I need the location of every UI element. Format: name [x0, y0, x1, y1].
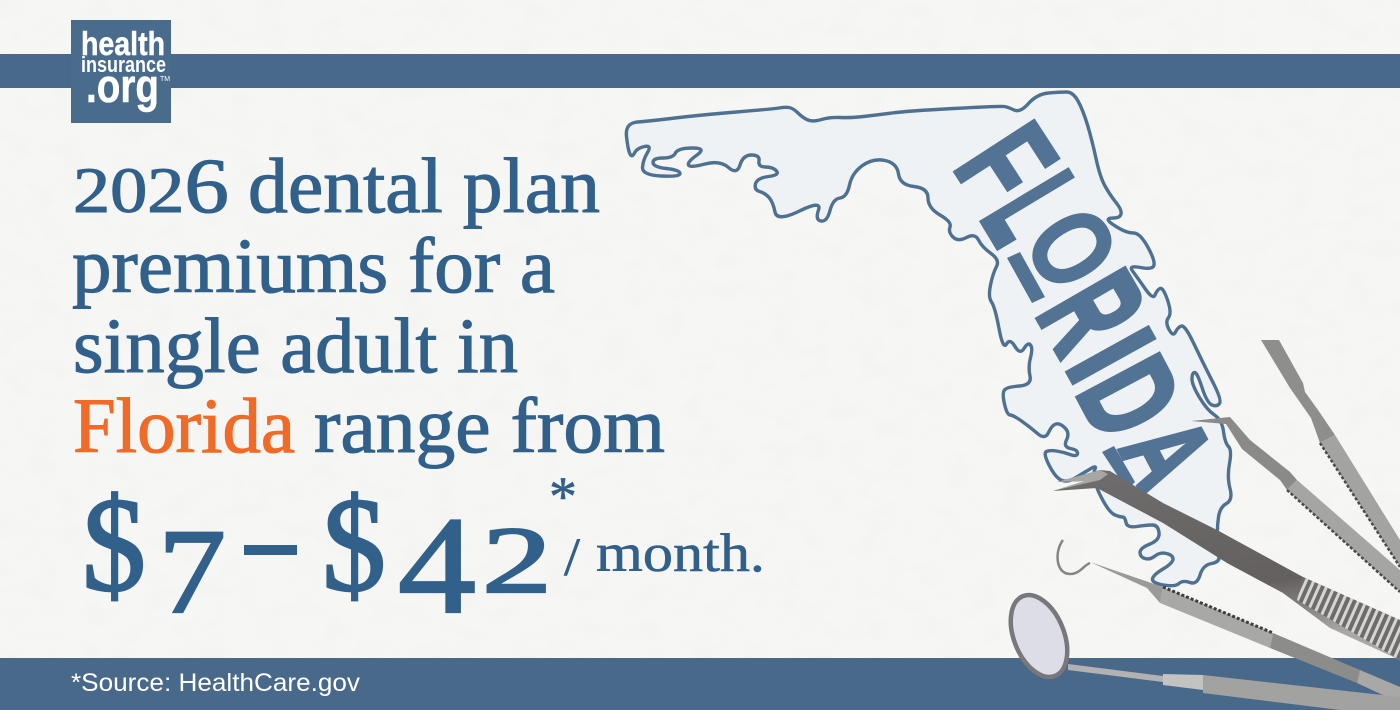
logo: healthinsurance.org: insurance	[81, 52, 166, 77]
Florida map	[626, 92, 1237, 586]
headline: premiums for a	[72, 222, 555, 309]
per month label: month.	[596, 523, 765, 583]
price range: $7-$42: $	[82, 471, 146, 620]
headline	[72, 142, 665, 469]
state name lettering: F	[927, 99, 1085, 229]
state name lettering	[927, 99, 1237, 509]
source note: *Source: HealthCare.gov	[71, 669, 361, 697]
state name lettering: D	[1050, 335, 1210, 459]
price range: $7-$42: *	[549, 466, 577, 528]
price range: $7-$42: 4	[398, 489, 476, 643]
state name lettering: R	[1008, 249, 1174, 376]
instrument: spatula	[1261, 340, 1400, 567]
instrument: tweezers	[1053, 470, 1400, 660]
headline: Florida	[73, 382, 295, 469]
price range: $7-$42: 2	[482, 507, 552, 613]
instrument: hook explorer	[1058, 540, 1400, 703]
per month label: /	[564, 527, 580, 587]
logo: healthinsurance.org	[71, 20, 171, 123]
instrument: curved probe	[1191, 417, 1400, 592]
headline: single adult in	[73, 302, 518, 389]
bottom banner bar	[0, 658, 1400, 710]
headline: 2026	[73, 142, 229, 229]
logo: healthinsurance.org: TM	[160, 76, 170, 83]
top banner bar	[0, 54, 1400, 88]
price range: $7-$42	[82, 466, 577, 643]
state name lettering: O	[1000, 187, 1143, 311]
logo: healthinsurance.org: .org	[86, 59, 159, 112]
state name lettering: L	[954, 152, 1109, 266]
instrument: dental mirror	[1000, 587, 1400, 710]
headline: dental plan	[248, 142, 600, 229]
state name lettering: A	[1095, 398, 1237, 509]
logo: healthinsurance.org: health	[81, 25, 165, 62]
dental instruments	[1000, 340, 1400, 710]
state name lettering: I	[1035, 303, 1187, 407]
headline: range from	[314, 382, 665, 469]
price range: $7-$42: $	[322, 471, 386, 620]
price range: $7-$42: 7	[158, 505, 226, 639]
state outline	[626, 92, 1231, 586]
